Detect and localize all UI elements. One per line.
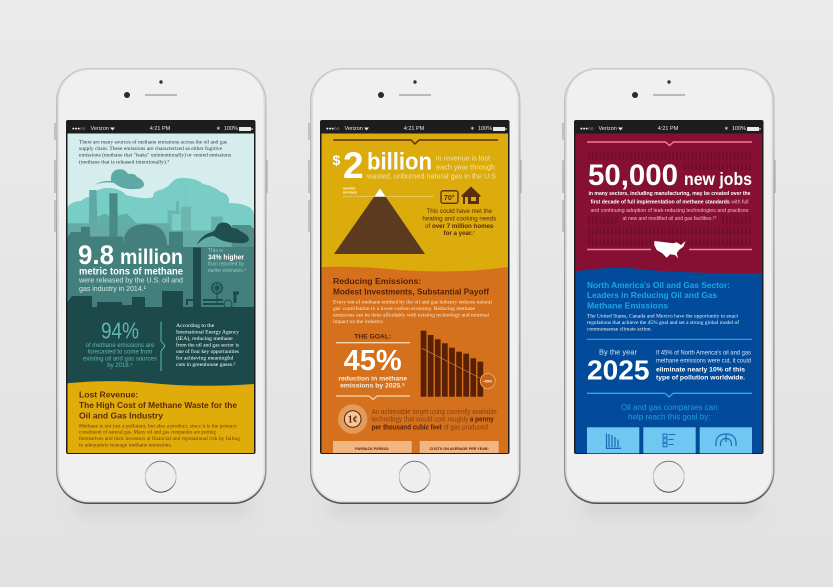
callout: 34% higher [208, 248, 246, 274]
small cloud [94, 169, 144, 189]
homes text: for a year.⁷ [444, 230, 475, 237]
status bar [580, 126, 760, 132]
orange section [322, 267, 508, 453]
phone 1 side buttons [55, 123, 267, 232]
icon: house [461, 186, 481, 204]
intro paragraph: (methane that is released intentionally).³ [79, 158, 169, 165]
intro paragraph [79, 138, 231, 165]
dome [123, 224, 167, 246]
homes text: This could have met the [426, 208, 493, 215]
intro paragraph: emissions (methane that "leaks" unintentionally) or vented emissions [79, 152, 231, 159]
heading: reducing emissions [333, 276, 489, 296]
distillation tower and pipes [168, 183, 191, 233]
dark chimney [109, 193, 118, 238]
status bar: ●●●○○ [580, 126, 594, 131]
heading: lost revenue [79, 390, 237, 420]
people pattern rows [587, 152, 752, 246]
phone 2 earpiece and camera [378, 80, 431, 98]
jobs text: at new and modified oil and gas facilities.¹⁰ [622, 215, 717, 222]
penny text: per thousand cubic feet of gas produced. [372, 422, 490, 431]
homes text: heating and cooking needs [422, 216, 496, 222]
IEA paragraph [176, 323, 240, 368]
stat: by the year 2025: 2025 [587, 354, 650, 385]
phone 3 shadow [584, 500, 756, 512]
foreground building layer [68, 227, 254, 315]
bar chart: -45% [483, 379, 493, 384]
stat: 9.8 million: 9.8 [78, 240, 114, 270]
IEA paragraph: According to the [176, 323, 215, 329]
phone 3 body [564, 68, 774, 504]
IEA paragraph: cuts in greenhouse gases.⁵ [176, 362, 235, 368]
pollution text: type of pollution worldwide. [656, 374, 745, 381]
icon: one cent: 1¢ [348, 414, 358, 426]
icon: united states map [654, 241, 686, 258]
status bar [72, 126, 252, 132]
pollution text: eliminate nearly 10% of this [656, 366, 745, 373]
status bar: ∗ [470, 126, 475, 132]
heading: lost revenue: The High Cost of Methane Waste for the [79, 400, 237, 410]
stat: 9.8 million: gas industry in 2014.¹ [79, 284, 146, 293]
stat: 9.8 million: million [120, 246, 183, 269]
bar chart [421, 331, 495, 397]
box: bar chart icon [587, 427, 639, 453]
heading: lost revenue: Oil and Gas Industry [79, 410, 163, 420]
phone 2 body [310, 68, 520, 504]
the goal: 45% [336, 333, 410, 400]
IEA paragraph: one of four key opportunities [176, 348, 240, 355]
divider with notch [587, 393, 752, 397]
distant building [211, 217, 223, 232]
north america paragraph: The United States, Canada and Mexico have the opportunity to enact [587, 313, 738, 319]
tall stack [89, 190, 98, 226]
reducing emissions paragraph: Every ton of methane emitted by the oil and gas industry reduces natural [333, 298, 492, 305]
phone 3: jobs and north america [563, 68, 775, 512]
icon: thermostat: 70° [444, 194, 455, 202]
stat: 94%: by 2018.⁵ [107, 362, 133, 369]
penny text: technology that would cost roughly a penny [372, 415, 494, 424]
foreground chimney [193, 248, 201, 308]
status bar: 100% [224, 126, 238, 132]
north america paragraph [587, 313, 739, 333]
IEA paragraph: from the oil and gas sector is [176, 342, 240, 348]
reducing emissions paragraph: emissions can be done affordably with existing technology and minimal [333, 312, 489, 318]
phone 2 screen [320, 120, 510, 454]
the goal: 45%: emissions by 2025.⁵ [340, 383, 405, 390]
lost revenue paragraph: to adequately manage methane emissions. [79, 443, 173, 449]
status bar [326, 126, 506, 132]
callout: 34% higher: This is [208, 248, 223, 254]
divider chevron [161, 322, 165, 371]
phone 1 body [56, 68, 266, 504]
intro paragraph: There are many sources of methane emissions across the oil and gas [79, 138, 227, 146]
phone 3 screen [574, 120, 764, 454]
heading: north america [587, 280, 730, 310]
the goal: 45%: reduction in methane [338, 375, 407, 382]
stat: 94%: of methane emissions are [86, 343, 155, 349]
stat: by the year 2025: By the year [599, 348, 637, 357]
phone 2 home button [399, 461, 430, 492]
status bar: Verizon [90, 126, 109, 132]
phone 2: revenue and reductions [309, 68, 521, 512]
reducing emissions paragraph: gas' contribution to a lower-carbon economy. Reducing methane [333, 306, 476, 312]
status bar: ∗ [724, 126, 729, 132]
status bar: ●●●○○ [72, 126, 86, 131]
intro paragraph: supply chain. These emissions are characterized as either fugitive [79, 145, 222, 152]
yellow section [68, 381, 254, 453]
icon: one cent [338, 404, 367, 434]
phone 1 screen [66, 120, 256, 454]
status bar: ∗ [216, 126, 221, 132]
callout: 34% higher: than reported by [208, 262, 244, 268]
headline: 50,000 new jobs: new jobs [684, 169, 752, 189]
pollution text: If 45% of North America's oil and gas [656, 351, 751, 357]
box: payback period [333, 441, 412, 453]
status bar: 4:21 PM [150, 126, 171, 132]
the goal: 45%: THE GOAL: [354, 333, 391, 340]
jobs text [588, 191, 750, 222]
icon: thermostat [441, 191, 458, 203]
box: gauge icon [700, 427, 752, 453]
phone 1 home button [145, 461, 176, 492]
mountain chart: WASTED [343, 186, 355, 190]
mid building layer [68, 223, 254, 300]
stat: 9.8 million: were released by the U.S. oil and [78, 276, 183, 285]
status bar: 100% [478, 126, 492, 132]
city illustration [68, 169, 254, 386]
north america paragraph: commonsense climate action. [587, 327, 653, 333]
callout: 34% higher: earlier estimates.⁴ [208, 268, 246, 274]
headline: $2 billion [332, 145, 498, 186]
phone 3 home button [653, 461, 684, 492]
mountain chart: REVENUE [343, 190, 357, 194]
lost revenue paragraph: themselves and their investors at financial and reputational risk by failing [79, 435, 240, 442]
status bar: 4:21 PM [658, 126, 679, 132]
homes text [422, 208, 496, 237]
phone 2 shadow [330, 500, 502, 512]
lost revenue paragraph: constituent of natural gas. Many oil and gas companies are putting [79, 429, 216, 436]
wind turbine and refinery icons [187, 282, 239, 308]
mountain chart [334, 186, 434, 254]
box: costs on average per year: COSTS ON AVERAGE PER YEAR: [430, 447, 489, 451]
headline: $2 billion: in revenue is lost [436, 154, 490, 163]
north america paragraph: regulations that achieve the 45% goal and set a strong global model of [587, 319, 739, 326]
factory roofs [97, 214, 137, 224]
smoke cloud [196, 222, 249, 245]
heading: reducing emissions: Reducing Emissions: [333, 276, 421, 286]
heading: north america: Methane Emissions [587, 300, 668, 310]
stat: 94%: existing oil and gas sources [83, 356, 157, 362]
stat: 94%: forecasted to come from [88, 350, 152, 356]
heading: north america: Leaders in Reducing Oil and Gas [587, 290, 717, 300]
heading: lost revenue: Lost Revenue: [79, 390, 138, 400]
status bar: 100% [732, 126, 746, 132]
headline: $2 billion: each year through [436, 162, 495, 171]
headline: 50,000 new jobs [588, 159, 752, 192]
blue section [576, 268, 762, 453]
jobs text: and continuing adoption of leak-reducing technologies and practices [590, 208, 749, 214]
phone 1 shadow [76, 500, 248, 512]
stat: 9.8 million: metric tons of methane [79, 266, 183, 277]
heading: north america: North America's Oil and Gas Sector: [587, 280, 730, 290]
jobs text: in many sectors, including manufacturing, may be created over the [588, 191, 750, 197]
dark skyline base [68, 291, 254, 383]
lost revenue paragraph: Methane is not just a pollutant, but also a product, since it is the primary [79, 423, 237, 429]
stat: 9.8 million [78, 240, 183, 293]
divider [587, 338, 752, 340]
maroon section [576, 134, 762, 276]
stat: 94% [83, 318, 157, 369]
box: payback period: PAYBACK PERIOD: [355, 447, 389, 451]
penny text: An achievable target using currently available [372, 407, 497, 416]
top divider with notch [587, 142, 752, 146]
reducing emissions paragraph: impact on the industry. [333, 319, 385, 325]
top divider with notch [333, 140, 498, 144]
headline: $2 billion: billion [367, 148, 432, 175]
companies text: help reach this goal by: [628, 412, 710, 421]
phone 1 earpiece and camera [124, 80, 177, 98]
box: costs on average per year [420, 441, 499, 453]
right building [232, 225, 254, 250]
background cloud bank [68, 178, 254, 320]
stat: 94%: 94% [101, 318, 139, 344]
status bar: 4:21 PM [404, 126, 425, 132]
box: checklist icon [643, 427, 696, 453]
penny text [372, 407, 497, 431]
reducing emissions paragraph [333, 298, 492, 325]
phone 2 side buttons [309, 123, 521, 232]
lost revenue paragraph [79, 423, 240, 449]
pollution text [656, 351, 751, 381]
status bar: ●●●○○ [326, 126, 340, 131]
yellow section [322, 134, 508, 274]
sky background [68, 134, 254, 304]
phone 1: infographic on methane emissions [55, 68, 267, 512]
bottom dividers [587, 248, 752, 250]
IEA paragraph: for achieving meaningful [176, 354, 234, 362]
headline: $2 billion: 2 [343, 145, 364, 186]
companies text [621, 403, 718, 421]
callout: 34% higher: 34% higher [208, 254, 244, 262]
the goal: 45%: 45% [344, 345, 402, 377]
IEA paragraph: International Energy Agency [176, 330, 239, 336]
phone 3 earpiece and camera [632, 80, 685, 98]
heading: reducing emissions: Modest Investments, Substantial Payoff [333, 286, 489, 296]
homes text: of over 7 million homes [425, 223, 494, 230]
phone 3 side buttons [563, 123, 775, 232]
IEA paragraph: (IEA), reducing methane [176, 335, 233, 342]
headline: $2 billion: wasted, unburned natural gas in the U.S. [366, 171, 498, 180]
headline: 50,000 new jobs: 50,000 [588, 159, 678, 192]
headline: $2 billion: $ [332, 152, 340, 168]
status bar: Verizon [344, 126, 363, 132]
companies text: Oil and gas companies can [621, 403, 718, 412]
status bar: Verizon [598, 126, 617, 132]
pollution text: methane emissions were cut, it could [656, 359, 751, 365]
jobs text: first decade of full implementation of methane standards with full [590, 199, 748, 205]
